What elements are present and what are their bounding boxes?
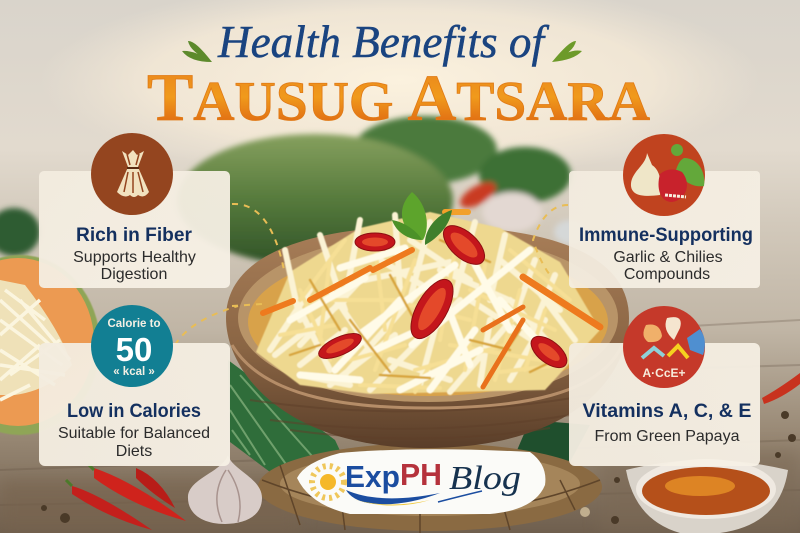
chili at right edge and spices (41, 373, 800, 524)
heading: Tausug Atsara: TAUSUG ATSARA (147, 59, 651, 135)
icon: vitamins badge (623, 306, 705, 388)
woven mat (258, 443, 602, 533)
description: Suitable for Balanced (58, 425, 210, 442)
heading: Immune-Supporting (579, 225, 753, 246)
logo: ExpPH Blog: Blog (449, 460, 521, 497)
description: From Green Papaya (595, 428, 740, 445)
carrot strips (263, 212, 600, 387)
chilies at bottom left (66, 464, 186, 530)
icon: calorie badge: Calorie to (107, 318, 161, 330)
icon: vitamins badge: A·CcE+ (642, 366, 686, 380)
dipping sauce bowl (626, 459, 788, 533)
heading: Health Benefits of: Health Benefits of (217, 16, 550, 67)
description: Garlic & Chilies (613, 249, 723, 266)
description: Supports Healthy (73, 249, 196, 266)
leaf ornament left (182, 41, 212, 62)
bowl body (226, 226, 629, 448)
papaya slice at left (0, 255, 100, 435)
icon: calorie badge: 50 (116, 331, 152, 368)
logo: ExpPH Blog: PH (400, 457, 442, 492)
description: Diets (116, 443, 152, 460)
title (147, 16, 651, 135)
red chili slices (315, 219, 572, 374)
heading: Vitamins A, C, & E (582, 401, 752, 422)
heading: Low in Calories (67, 401, 201, 422)
blurred green papayas and herbs behind the bowl (0, 116, 586, 266)
description: Compounds (624, 266, 710, 283)
logo: ExpPH Blog (297, 449, 545, 514)
banana leaf under bowl (228, 360, 590, 472)
icon: calorie badge (91, 305, 173, 387)
description: Digestion (101, 266, 167, 283)
leaf ornament right (552, 41, 582, 62)
panel: immune-supporting (569, 134, 760, 288)
icon: calorie badge: « kcal » (113, 366, 155, 378)
icon: sun (312, 466, 344, 498)
panel: rich in fiber (39, 133, 230, 288)
icon: garlic and chilies (623, 134, 705, 216)
heading: Rich in Fiber (76, 225, 193, 246)
logo: ExpPH Blog: Exp (345, 459, 400, 494)
panel: vitamins (569, 306, 760, 466)
basil garnish (392, 192, 452, 245)
icon: fiber bundle (91, 133, 173, 215)
inner broth (238, 234, 618, 402)
bowl of atsara (226, 192, 629, 448)
dashed connector lines (175, 204, 568, 345)
shredded papaya mound (256, 212, 600, 394)
garlic bulb (188, 455, 262, 524)
panel: low in calories (39, 305, 230, 466)
